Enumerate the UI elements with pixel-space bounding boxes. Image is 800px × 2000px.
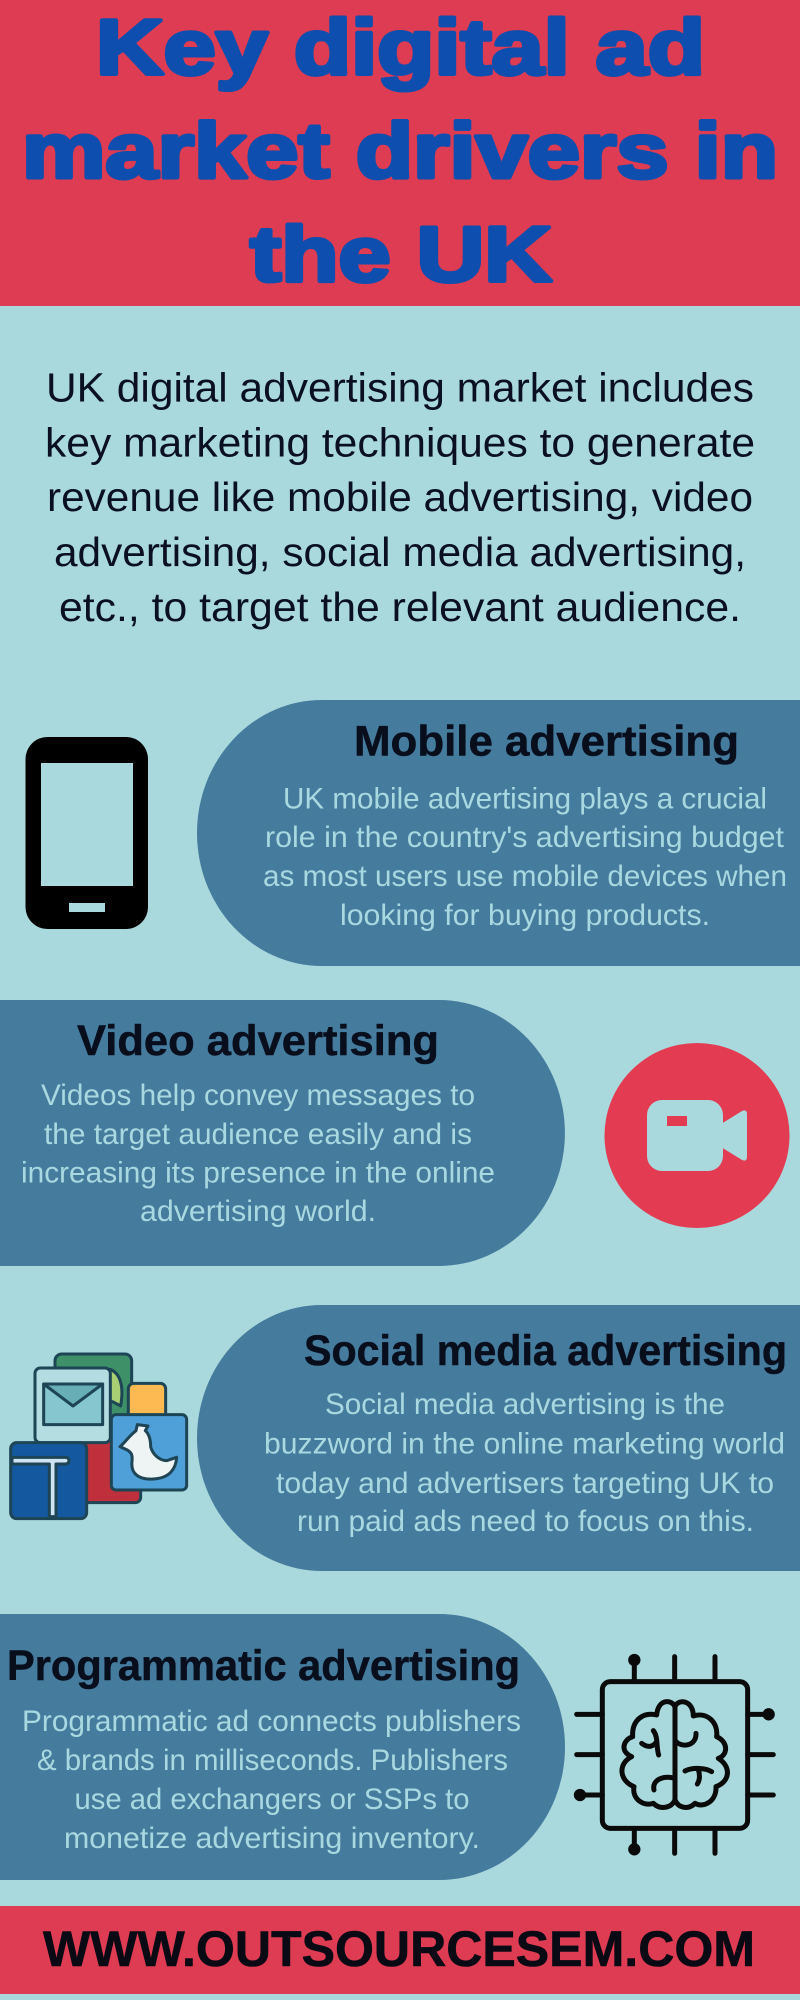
intro text block: UK digital advertising market includes <box>46 364 754 410</box>
body: social media advertising: today and advertisers targeting UK to <box>276 1467 774 1500</box>
body: programmatic advertising: monetize advertising inventory. <box>64 1822 480 1855</box>
body: video advertising: the target audience easily and is <box>44 1118 472 1151</box>
body: programmatic advertising: Programmatic ad connects publishers <box>22 1705 521 1738</box>
intro text block: advertising, social media advertising, <box>54 529 746 575</box>
intro text block <box>45 364 755 630</box>
body: mobile advertising: UK mobile advertising plays a crucial <box>283 782 767 816</box>
footer banner <box>0 1906 800 1994</box>
heading: programmatic advertising: Programmatic advertising <box>7 1642 520 1690</box>
body: video advertising: advertising world. <box>140 1195 376 1228</box>
body: mobile advertising <box>263 782 787 932</box>
heading: video advertising: Video advertising <box>77 1017 439 1065</box>
body: video advertising: increasing its presence in the online <box>21 1156 495 1190</box>
body: mobile advertising: role in the country's advertising budget <box>265 821 785 854</box>
panel: mobile advertising <box>197 700 800 966</box>
intro text block: key marketing techniques to generate <box>45 420 755 466</box>
body: programmatic advertising: & brands in milliseconds. Publishers <box>37 1744 508 1777</box>
intro text block: revenue like mobile advertising, video <box>47 474 753 520</box>
heading: mobile advertising: Mobile advertising <box>354 718 739 766</box>
body: video advertising: Videos help convey messages to <box>41 1079 475 1112</box>
body: social media advertising <box>264 1388 785 1538</box>
title: market drivers in <box>22 106 778 194</box>
body: social media advertising: Social media advertising is the <box>325 1388 725 1421</box>
footer website address: WWW.OUTSOURCESEM.COM <box>43 1921 755 1977</box>
icon: video camera <box>604 1043 790 1228</box>
body: programmatic advertising: use ad exchangers or SSPs to <box>74 1783 470 1816</box>
panel: video advertising <box>0 1000 565 1266</box>
heading: social media advertising: Social media advertising <box>304 1327 787 1375</box>
panel: programmatic advertising <box>0 1614 565 1880</box>
body: video advertising <box>21 1079 495 1228</box>
body: mobile advertising: as most users use mobile devices when <box>263 860 787 893</box>
icon: brain on circuit chip <box>576 1656 773 1853</box>
body: programmatic advertising <box>22 1705 521 1855</box>
intro text block: etc., to target the relevant audience. <box>59 584 741 630</box>
body: social media advertising: run paid ads need to focus on this. <box>297 1505 754 1538</box>
title: the UK <box>250 210 552 298</box>
panel: social media advertising <box>197 1305 800 1571</box>
title <box>22 3 778 298</box>
icon: mobile phone <box>26 737 148 929</box>
icon: social media apps <box>11 1354 187 1519</box>
title: Key digital ad <box>96 3 705 91</box>
title banner <box>0 0 800 306</box>
body: social media advertising: buzzword in the online marketing world <box>264 1428 785 1460</box>
body: mobile advertising: looking for buying products. <box>340 899 710 932</box>
